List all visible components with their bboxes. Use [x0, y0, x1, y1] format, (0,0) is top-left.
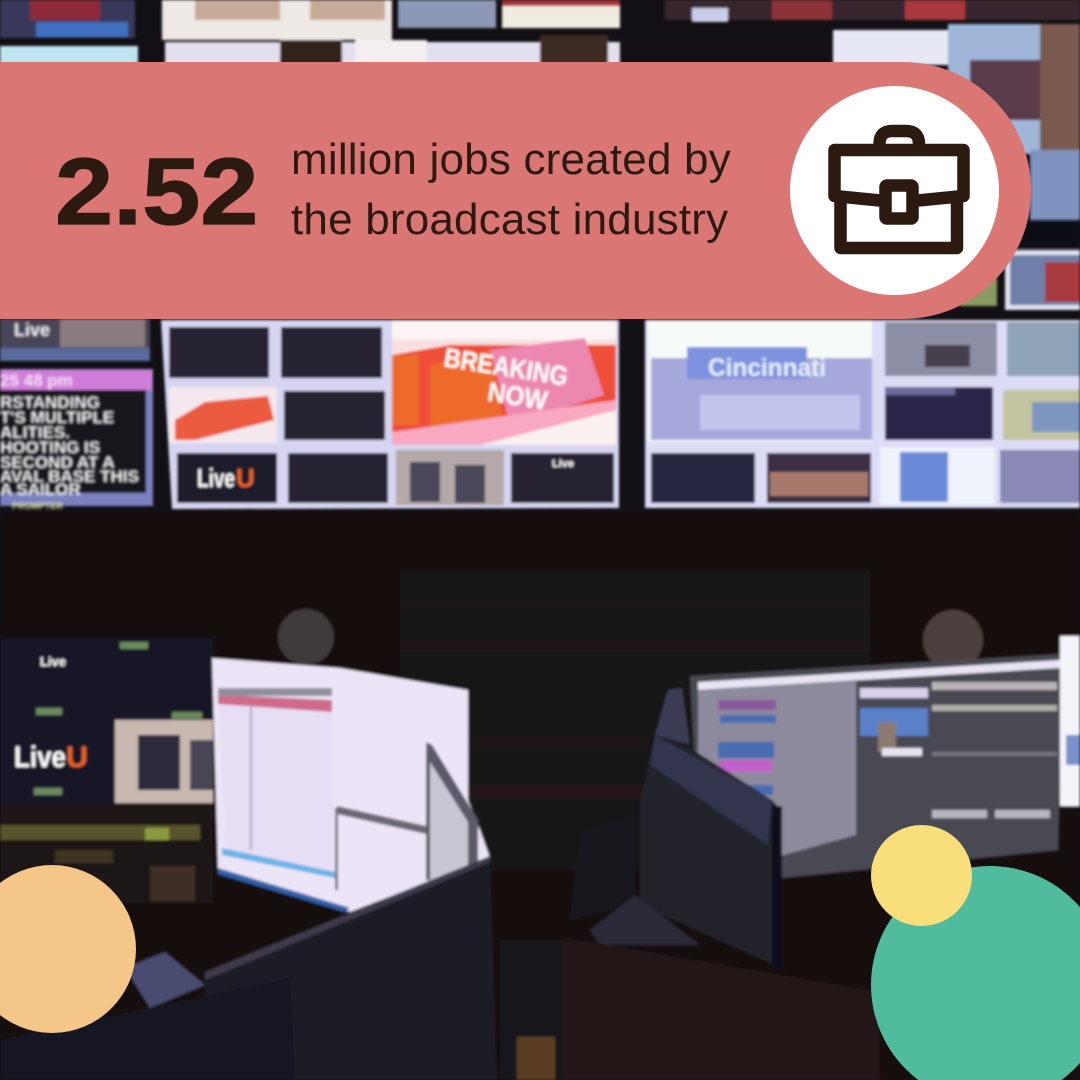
left prompter [0, 319, 153, 506]
banner: jobs statistic [0, 62, 1031, 319]
right console monitor [690, 636, 1080, 878]
left desk monitor: Live [40, 654, 66, 669]
statistic description: million jobs created by [291, 135, 731, 184]
prompter text: AVAL BASE THIS [0, 467, 139, 486]
prompter text: 25 48 pm [0, 371, 73, 390]
white rundown monitor [212, 658, 490, 912]
icon: briefcase [790, 86, 999, 295]
breaking news tile: BREAKING [442, 343, 570, 392]
prompter text: Live [14, 320, 50, 340]
center wall frame: Live [552, 458, 574, 470]
breaking news tile: NOW [486, 377, 550, 416]
center wall frame [161, 320, 619, 509]
prompter text [0, 320, 139, 511]
prompter text: RSTANDING [0, 393, 100, 412]
statistic number: 2.52 [55, 139, 258, 245]
prompter text: ALITIES. [0, 423, 70, 442]
center wall frame: U [236, 463, 255, 493]
decorative circle: yellow [871, 825, 972, 926]
breaking news tile [392, 320, 616, 445]
prompter text: PROMPTER [12, 501, 64, 511]
top monitors [0, 0, 1080, 248]
center wall frame: Live [197, 463, 235, 493]
prompter text: HOOTING IS [0, 438, 100, 457]
decorative circle: orange [0, 865, 136, 1033]
back wall [0, 515, 1080, 1080]
right wall frame [645, 250, 1080, 508]
prompter text: A SAILOR [0, 480, 81, 499]
left desk monitor: Live [14, 741, 66, 774]
statistic description [291, 135, 731, 244]
statistic description: the broadcast industry [291, 195, 728, 244]
right wall frame: Cincinnati [708, 354, 826, 382]
foreground dark monitors [0, 688, 880, 1080]
prompter text: T'S MULTIPLE [0, 408, 114, 427]
decorative circle: green [871, 866, 1080, 1080]
left desk monitor: U [66, 741, 88, 774]
left desk monitor [0, 638, 213, 903]
prompter text: SECOND AT A [0, 453, 115, 472]
